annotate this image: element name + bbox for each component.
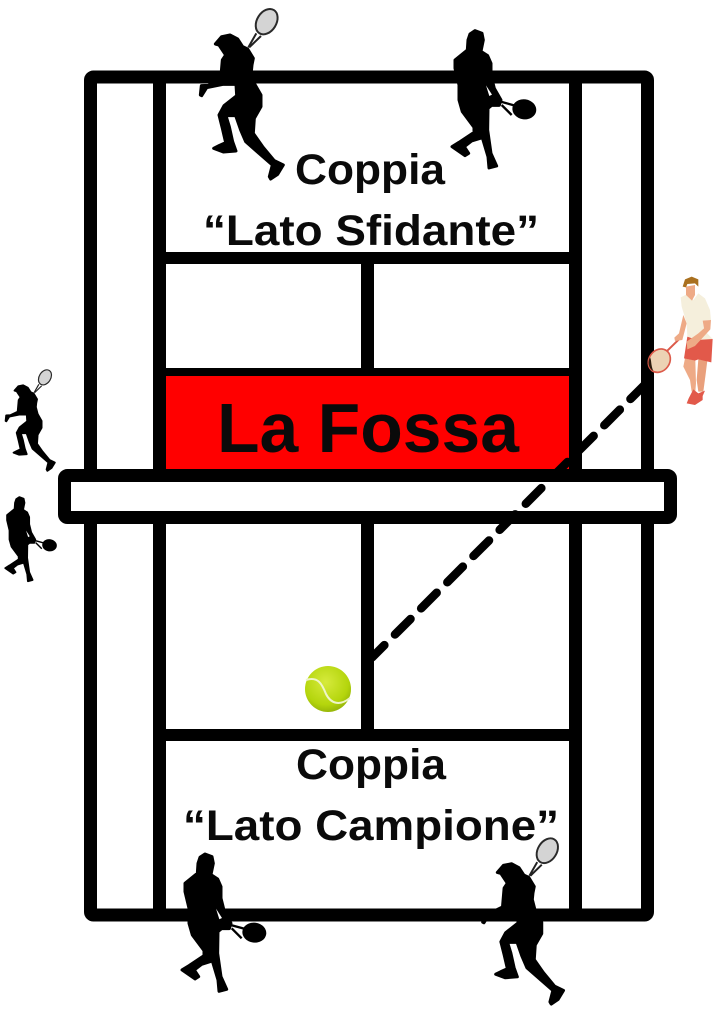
neck and head bbox=[686, 285, 695, 301]
heading: Coppia Lato Sfidante: Coppia bbox=[295, 146, 446, 194]
player silhouette: top left woman bbox=[200, 5, 283, 179]
heading: Coppia Lato Sfidante: “Lato Sfidante” bbox=[203, 207, 539, 255]
left arm bbox=[674, 315, 687, 341]
dashed shot trajectory arrow bbox=[372, 384, 646, 658]
shoes bbox=[687, 389, 705, 405]
racket bbox=[644, 345, 675, 377]
heading: Coppia Lato Campione: “Lato Campione” bbox=[183, 802, 559, 850]
player silhouette: bottom right woman bbox=[483, 834, 564, 1004]
small player silhouette: woman at side bbox=[6, 367, 55, 471]
legs bbox=[683, 358, 696, 392]
heading: Coppia Lato Campione: Coppia bbox=[296, 741, 447, 789]
icon: tennis ball bbox=[305, 666, 351, 712]
right forearm bbox=[687, 320, 711, 349]
player illustration: serving player in colour bbox=[644, 277, 713, 405]
label: La Fossa: La Fossa bbox=[217, 389, 520, 467]
net bbox=[64, 476, 670, 518]
court outline bbox=[90, 77, 648, 915]
shirt bbox=[681, 293, 713, 340]
red zone: La Fossa bbox=[166, 368, 569, 471]
heading: Coppia Lato Campione bbox=[183, 741, 559, 850]
player silhouette: top right man bbox=[452, 31, 538, 168]
shorts bbox=[684, 337, 713, 362]
small player silhouette: man at side bbox=[5, 497, 58, 581]
player silhouette: bottom left man bbox=[182, 854, 268, 991]
heading: Coppia Lato Sfidante bbox=[203, 146, 539, 255]
